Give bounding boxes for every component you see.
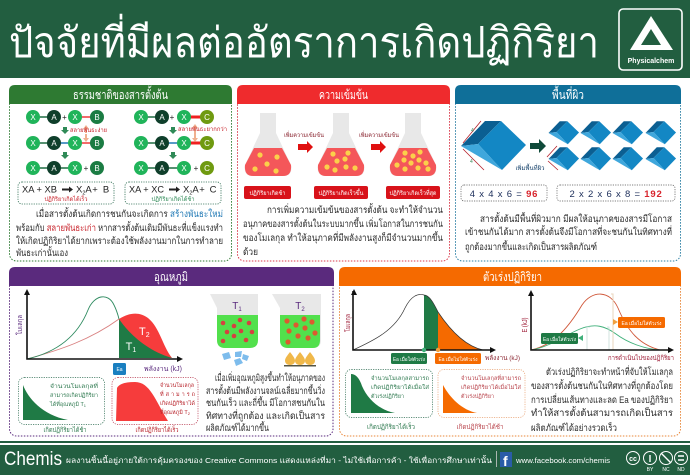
equation box: XA + XC: + (199, 184, 205, 196)
sub box: T2 molecules: เกิดปฏิกิริยาได้ (160, 400, 195, 407)
flask medium concentration (318, 113, 364, 176)
chart: catalyst distribution: พลังงาน (kJ) (485, 354, 520, 362)
heading: ความเข้มข้น (319, 88, 368, 102)
reaction speed labels (244, 186, 440, 199)
molecules: strong bond: + (170, 113, 175, 122)
big cube: 4 (470, 159, 473, 165)
big cube: 4 (471, 128, 474, 134)
molecules: weak bond: X (30, 139, 36, 148)
icons: creative commons (626, 452, 688, 473)
icon: facebook (500, 452, 512, 469)
calc box 96: 4 x 4 x 6 = 96 (470, 189, 538, 200)
chart: energy distribution (15, 289, 183, 375)
molecules: strong bond: X (138, 139, 144, 148)
chart: catalyst distribution (344, 289, 520, 364)
chart: reaction progress: E (kJ) (522, 318, 529, 332)
icons: creative commons: cc (629, 456, 637, 463)
equation box: XA + XB: XA + XB (22, 184, 57, 196)
body text: อนุภาคของสารตั้งต้นในระบบมากขึ้น เพิ่มโอกาสในการชนกัน (243, 217, 443, 230)
beaker T1 with ice: 1 (238, 307, 242, 313)
molecules: strong bond: X (181, 139, 187, 148)
sub box: without catalyst: เกิดปฏิกิริยาได้ช้า (456, 423, 504, 431)
heading: ตัวเร่งปฏิกิริยา (483, 270, 542, 284)
body text: ผลิตภัณฑ์ได้อย่างรวดเร็ว (531, 421, 617, 434)
beaker T2 with flame: T (295, 301, 301, 312)
molecules: weak bond: X (72, 139, 78, 148)
body text (206, 371, 325, 434)
chart: energy distribution: 1 (132, 347, 136, 354)
chart: energy distribution: T (126, 341, 132, 353)
molecules: strong bond: X (138, 164, 144, 173)
body text (243, 203, 443, 258)
body text: ทำให้สารตั้งต้นสามารถเกิดเป็นสาร (531, 406, 673, 419)
arrow (530, 139, 546, 153)
sub box: with catalyst: จำนวนโมเลกุลสามารถ (371, 374, 429, 382)
molecules: strong bond: + (194, 164, 199, 173)
sub box: T2 molecules: ที่อุณหภูมิ T (160, 410, 188, 416)
body text: ด้วย (243, 247, 258, 258)
molecules: strong bond: X (181, 113, 187, 122)
molecules: weak bond: X (72, 113, 78, 122)
sub box: T2 molecules: เกิดปฏิกิริยาได้เร็ว (136, 425, 179, 434)
facebook url: www.facebook.com/chemis (515, 456, 610, 465)
chart: reaction progress: การดำเนินไปของปฏิกิริยา (608, 354, 674, 362)
icon: facebook: f (503, 453, 508, 469)
molecules: strong bond: C (204, 164, 210, 173)
body text: การเพิ่มความเข้มข้นของสารตั้งต้น จะทำให้จำนวน (267, 203, 443, 216)
sub box: T1 molecules: จำนวนโมเลกุลที่ (50, 382, 98, 390)
sub box: without catalyst: จำนวนโมเลกุลที่สามารถ (461, 374, 521, 382)
molecules: weak bond: X (72, 164, 78, 173)
molecules: weak bond: X (30, 113, 36, 122)
molecules: weak bond: A (51, 164, 57, 173)
beaker T1 with ice: T (232, 301, 238, 312)
reaction speed labels: ปฏิกิริยาเกิดเร็วที่สุด (390, 188, 437, 197)
sub box: with catalyst (346, 370, 432, 431)
body text: ชนกันเร็ว และถี่ขึ้น มีโอกาสชนกันใน (206, 396, 325, 409)
molecules: weak bond: B (94, 139, 100, 148)
body text (16, 207, 223, 259)
molecules: weak bond: + (84, 164, 89, 173)
icons: creative commons: BY (647, 467, 654, 473)
sub box: T2 molecules: จำนวนโมเลกุล (160, 381, 194, 389)
label: increase surface: เพิ่มพื้นที่ผิว (516, 162, 544, 172)
body text: ให้เกิดปฏิกิริยาได้ยากเพราะต้องใช้พลังงานมากในการทำลาย (16, 235, 223, 247)
body text: ทิศทางที่ถูกต้อง และเกิดเป็นสาร (206, 409, 325, 422)
big cube (461, 121, 526, 170)
molecules: strong bond: A (159, 164, 165, 173)
flask high concentration (390, 113, 436, 176)
chart: energy distribution: พลังงาน (kJ) (144, 365, 182, 373)
equation box: XA + XC: C (210, 184, 217, 196)
beaker T1 with ice (210, 294, 258, 366)
sub box: without catalyst: เกิดปฏิกิริยาได้เมื่อไม่ใส่ (461, 383, 522, 391)
sub box: T2 molecules (112, 378, 198, 434)
panel: temperature (9, 267, 334, 436)
panel: surface area (455, 85, 681, 261)
chart: reaction progress: Ea เมื่อไม่ใส่ตัวเร่ง (622, 320, 662, 327)
molecules: strong bond: A (159, 139, 165, 148)
body text: สารตั้งต้นมีพลังงานจลน์เฉลี่ยมากขึ้นวิ่ง (206, 384, 325, 397)
molecules: strong bond: C (204, 139, 210, 148)
molecules: weak bond: B (94, 113, 100, 122)
icons: creative commons: ND (677, 467, 685, 473)
footer (0, 441, 690, 475)
title: ปัจจัยที่มีผลต่ออัตราการเกิดปฏิกิริยา (9, 14, 599, 66)
brand: Chemis (4, 449, 62, 470)
body text: พันธะเก่านั้นเอง (16, 246, 68, 259)
chart: reaction progress (522, 290, 674, 362)
body text: ถูกต้องมากขึ้นและเกิดเป็นสารผลิตภัณฑ์ (465, 240, 597, 253)
equation box: XA + XB: 2 (82, 190, 85, 196)
calc box 192 (557, 185, 675, 201)
sub box: T1 molecules: สามารถเกิดปฏิกิริยา (50, 392, 98, 399)
molecules: weak bond (26, 110, 107, 175)
equation box: XA + XB: + (92, 184, 98, 196)
logo: Physicalchem (619, 9, 682, 70)
molecules: weak bond: B (94, 164, 100, 173)
chart: catalyst distribution: โมเลกุล (344, 314, 352, 332)
equation box: XA + XB: A (85, 184, 92, 196)
equation box: XA + XC: XA + XC (129, 184, 164, 196)
beaker T2 with flame: 2 (301, 307, 305, 313)
calc box 96 (461, 185, 547, 201)
sub box: with catalyst: เกิดปฏิกิริยาได้เมื่อใส่ (371, 383, 430, 391)
panel: reactant nature (9, 85, 232, 261)
body text: พร้อมกับ สลายพันธะเก่า หากสารตั้งต้นเดิมมีพันธะที่แข็งแรงทำ (16, 221, 223, 234)
chart: energy distribution: โมเลกุล (15, 315, 24, 335)
license line: ผลงานชิ้นนี้อยู่ภายใต้การคุ้มครองของ Creative Commons แสดงแหล่งที่มา - ไม่ใช้เพื่อการค้า - ใช้เพื่อการศึกษาเท่านั้น (66, 455, 492, 465)
body text (465, 212, 672, 253)
chart: energy distribution: 2 (146, 332, 150, 339)
sub box: T1 molecules: 1 (84, 403, 87, 408)
chart: catalyst distribution: Ea เมื่อไม่ใส่ตัวเร่ง (438, 356, 478, 363)
icons: creative commons: NC (662, 467, 670, 473)
panel: catalyst (339, 267, 681, 436)
equation box: XA + XC: A (192, 184, 199, 196)
molecules: weak bond: A (51, 113, 57, 122)
equation box: XA + XC: 2 (189, 190, 192, 196)
reaction speed labels: ปฏิกิริยาเกิดช้า (250, 190, 286, 197)
chart: energy distribution: Ea (116, 367, 123, 373)
molecules: strong bond (134, 110, 227, 175)
body text: เมื่อเพิ่มอุณหภูมิสูงขึ้นทำให้อนุภาคของ (215, 371, 325, 384)
molecules: weak bond: สลายพันธะง่าย (70, 127, 107, 134)
sub box: T1 molecules: ได้ที่อุณหภูมิ T (50, 402, 84, 408)
molecules: weak bond: X (30, 164, 36, 173)
chart: catalyst distribution: Ea เมื่อใส่ตัวเร่ง (393, 356, 426, 363)
chart: reaction progress: Ea เมื่อใส่ตัวเร่ง (543, 336, 577, 343)
sub box: T2 molecules: 2 (188, 411, 191, 416)
sub box: without catalyst (438, 370, 525, 431)
body text: เมื่อสารตั้งต้นเกิดการชนกันจะเกิดการ สร้างพันธะใหม่ (36, 207, 223, 220)
heading: อุณหภูมิ (154, 270, 188, 285)
small cubes (547, 121, 676, 170)
molecules: strong bond: C (204, 113, 210, 122)
molecules: strong bond: X (138, 113, 144, 122)
molecules: strong bond: สลายพันธะยากกว่า (178, 126, 227, 133)
body text: ผลิตภัณฑ์ได้มากขึ้น (206, 421, 269, 434)
sub box: T1 molecules: เกิดปฏิกิริยาได้ช้า (44, 426, 87, 434)
flask low concentration (245, 113, 291, 176)
equation box: XA + XB: ปฏิกิริยาเกิดได้เร็ว (44, 194, 88, 203)
sub box: with catalyst: เกิดปฏิกิริยาได้เร็ว (367, 422, 415, 431)
sub box: without catalyst: ตัวเร่งปฏิกิริยา (461, 393, 494, 400)
equation box: XA + XC (125, 182, 221, 204)
molecules: weak bond: A (51, 139, 57, 148)
arrows: increase concentration: เพิ่มความเข้มข้น (359, 131, 399, 139)
beaker T2 with flame (272, 294, 321, 366)
heading: ธรรมชาติของสารตั้งต้น (73, 85, 168, 102)
equation box: XA + XB: X (76, 184, 82, 196)
equation box: XA + XB: B (103, 184, 109, 196)
arrows: increase concentration (284, 131, 399, 153)
equation box: XA + XB (18, 182, 114, 204)
chart: energy distribution: T (139, 326, 146, 338)
molecules: strong bond: X (181, 164, 187, 173)
molecules: strong bond: A (159, 113, 165, 122)
equation box: XA + XC: ปฏิกิริยาเกิดได้ช้า (152, 195, 194, 203)
body text: ของโมเลกุล ทำให้อนุภาคที่มีพลังงานสูงก็มีจำนวนมากขึ้น (243, 231, 443, 244)
equation box: XA + XC: X (183, 184, 189, 196)
sub box: with catalyst: ตัวเร่งปฏิกิริยา (371, 393, 404, 400)
logo: Physicalchem: Physicalchem (628, 58, 674, 65)
body text (531, 365, 673, 434)
sub box: T2 molecules: ที่สามารถ (160, 390, 195, 398)
heading: พื้นที่ผิว (552, 85, 584, 102)
arrows: increase concentration: เพิ่มความเข้มข้น (284, 131, 324, 139)
panel: concentration (237, 85, 450, 261)
reaction speed labels: ปฏิกิริยาเกิดเร็วขึ้น (318, 187, 364, 197)
calc box 192: 2 x 2 x 6 x 8 = 192 (569, 189, 663, 200)
sub box: T1 molecules (18, 378, 104, 434)
molecules: weak bond: + (62, 113, 67, 122)
header banner (0, 0, 690, 78)
